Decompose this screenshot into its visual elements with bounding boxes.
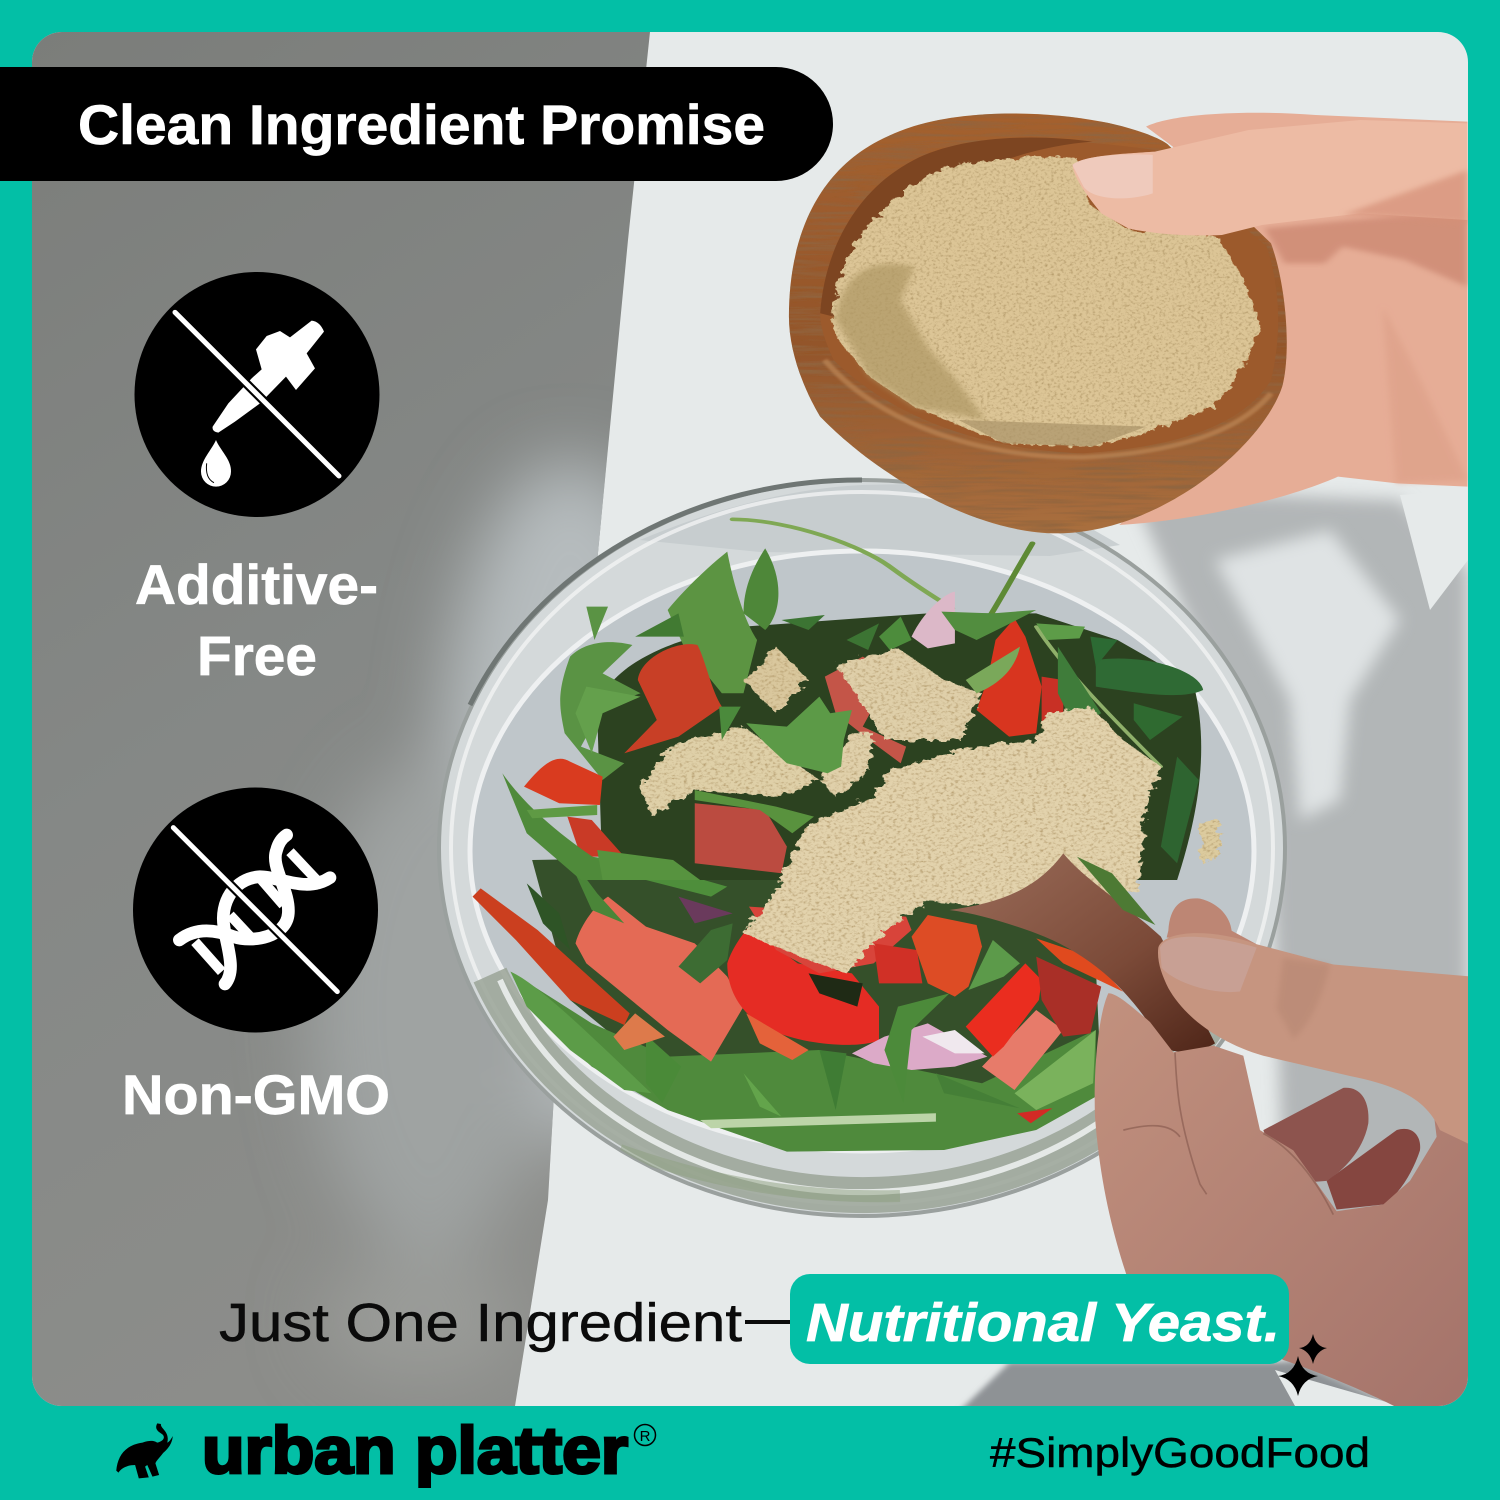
footer logo: wordmark: urban platter bbox=[202, 1413, 628, 1487]
hand holding spoon bbox=[1095, 898, 1468, 1407]
fingernail bbox=[1160, 937, 1257, 992]
window shadow on left bbox=[32, 32, 650, 1406]
label: additive-free bbox=[135, 553, 378, 687]
icon: non-GMO DNA bbox=[133, 788, 378, 1032]
thumb over bowl bbox=[1072, 120, 1467, 287]
yeast in bowl bbox=[831, 157, 1260, 447]
onion bbox=[852, 1023, 987, 1070]
tagline bbox=[219, 1274, 1289, 1364]
yeast flakes bbox=[641, 647, 1220, 973]
table shadows on the right bbox=[950, 490, 1468, 1420]
footer logo: wordmark: R bbox=[640, 1428, 651, 1445]
dark salad base bbox=[532, 860, 1099, 1084]
ring and little fingers bbox=[1263, 1088, 1368, 1184]
lighter reflection in window shadow bbox=[296, 434, 608, 1371]
leaves over flakes bbox=[746, 697, 852, 773]
thumbnail bbox=[1072, 154, 1153, 198]
highlight pill bbox=[790, 1274, 1289, 1364]
arugula leaves bbox=[668, 552, 757, 693]
wooden spoon bbox=[949, 853, 1215, 1052]
title banner: Clean Ingredient Promise bbox=[78, 93, 765, 156]
dark right leaves bbox=[1096, 658, 1203, 695]
palm and main fingers bbox=[1095, 993, 1468, 1407]
footer logo: elephant bbox=[116, 1423, 173, 1478]
dark salad core bbox=[597, 613, 1201, 880]
finger creases bbox=[1123, 1052, 1333, 1215]
highlight pill: Nutritional Yeast. bbox=[806, 1293, 1280, 1353]
wooden bowl of yeast bbox=[789, 114, 1287, 533]
tomato pieces bbox=[624, 644, 722, 753]
bowl rim highlight bbox=[825, 360, 1271, 457]
title banner bbox=[0, 67, 833, 181]
tomato pieces bbox=[473, 888, 630, 1025]
icon: sparkles bbox=[1278, 1334, 1327, 1396]
label: additive-free: Additive- bbox=[135, 553, 378, 616]
light lower greens bbox=[510, 972, 1096, 1152]
stems bbox=[733, 519, 1161, 767]
index finger bbox=[1158, 933, 1468, 1144]
hand palm behind bowl bbox=[1119, 113, 1467, 525]
footer hashtag: #SimplyGoodFood bbox=[990, 1429, 1370, 1476]
label: additive-free: Free bbox=[197, 624, 317, 687]
onion bbox=[912, 592, 955, 648]
salad upper half bbox=[502, 519, 1220, 973]
tagline: Just One Ingredient bbox=[219, 1293, 742, 1353]
glass bowl bbox=[439, 480, 1285, 1216]
label: non-GMO: Non-GMO bbox=[122, 1063, 390, 1126]
salad lower half bbox=[473, 850, 1123, 1152]
icon: additive-free dropper bbox=[134, 272, 380, 517]
bowl inner wall bbox=[820, 140, 1278, 453]
fingertip bbox=[1167, 898, 1257, 944]
dark leaf on tomatoes bbox=[678, 923, 733, 983]
